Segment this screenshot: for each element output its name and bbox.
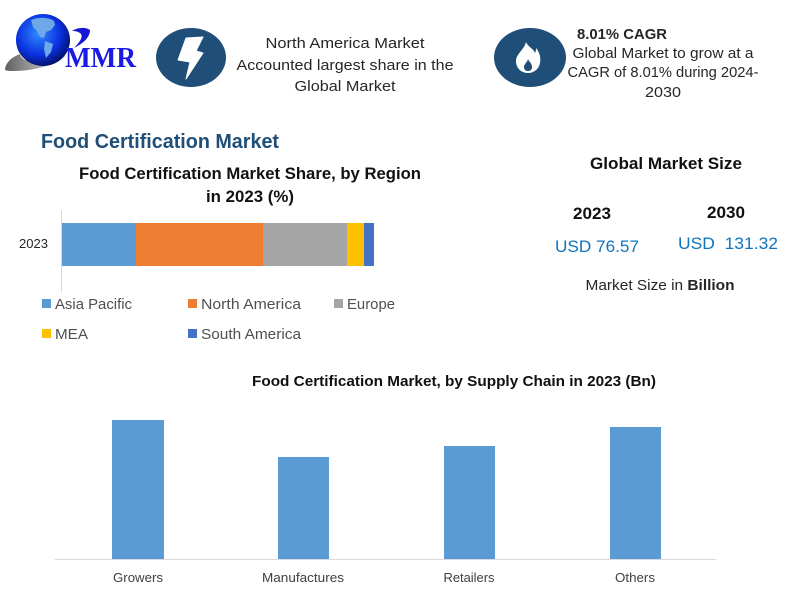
chart title: share by region: Food Certification Market Share, by Region: [79, 164, 421, 183]
icon: lightning bolt: [156, 28, 226, 87]
legend: South America: [201, 326, 302, 343]
logo swoosh: [5, 54, 68, 71]
chart title: share by region: in 2023 (%): [206, 187, 294, 206]
segment: Asia Pacific: [62, 223, 136, 266]
legend: [42, 296, 395, 343]
segment: Europe: [263, 223, 347, 266]
logo: MMR globe: [5, 14, 137, 74]
segment: North America: [136, 223, 263, 266]
bar: Others: [610, 427, 661, 559]
year 2023: 2023: [573, 204, 611, 223]
callout: CAGR: 2030: [645, 84, 681, 101]
callout: North America: North America Market: [266, 35, 425, 52]
axis labels: Growers: [113, 570, 164, 585]
axis labels: Retailers: [444, 570, 495, 585]
legend: MEA: [55, 326, 88, 343]
legend: North America: [201, 296, 302, 313]
logo wordmark: MMR: [65, 43, 137, 74]
year 2030: 2030: [707, 203, 745, 222]
chart title: share by region: [79, 164, 421, 206]
unit note: Market Size in Billion: [586, 277, 734, 294]
value 2030: USD 131.32: [678, 235, 778, 253]
callout: North America: Accounted largest share in the: [236, 57, 454, 74]
icon: flame: [494, 28, 566, 87]
callout: North America: [236, 35, 454, 95]
axis labels: Manufactures: [262, 570, 345, 585]
bar: Manufactures: [278, 457, 329, 559]
callout: CAGR: Global Market to grow at a: [572, 45, 754, 62]
heading: Global Market Size: [590, 154, 742, 173]
bar chart: supply chain: [55, 420, 716, 585]
legend: Asia Pacific: [55, 296, 132, 313]
panel: global market size: [555, 154, 778, 294]
logo globe: [16, 14, 70, 66]
callout: North America: Global Market: [294, 78, 396, 95]
bar: Retailers: [444, 446, 495, 559]
axis labels: [113, 570, 656, 585]
callout: CAGR: [568, 26, 758, 101]
logo continents: [31, 18, 55, 58]
segment: MEA: [347, 223, 364, 266]
segment: South America: [364, 223, 374, 266]
legend: Europe: [347, 296, 395, 313]
stacked bar chart: [19, 210, 374, 292]
value 2023: USD 76.57: [555, 238, 639, 256]
heading: Food Certification Market: Food Certification Market: [41, 131, 279, 153]
category label: 2023: [19, 237, 48, 251]
chart title: supply chain: Food Certification Market, by Supply Chain in 2023 (Bn): [252, 373, 656, 390]
logo blue arc: [72, 28, 90, 48]
callout: CAGR: CAGR of 8.01% during 2024-: [568, 64, 758, 81]
axis labels: Others: [615, 570, 656, 585]
callout: CAGR: 8.01% CAGR: [577, 26, 667, 43]
bar: Growers: [112, 420, 164, 559]
